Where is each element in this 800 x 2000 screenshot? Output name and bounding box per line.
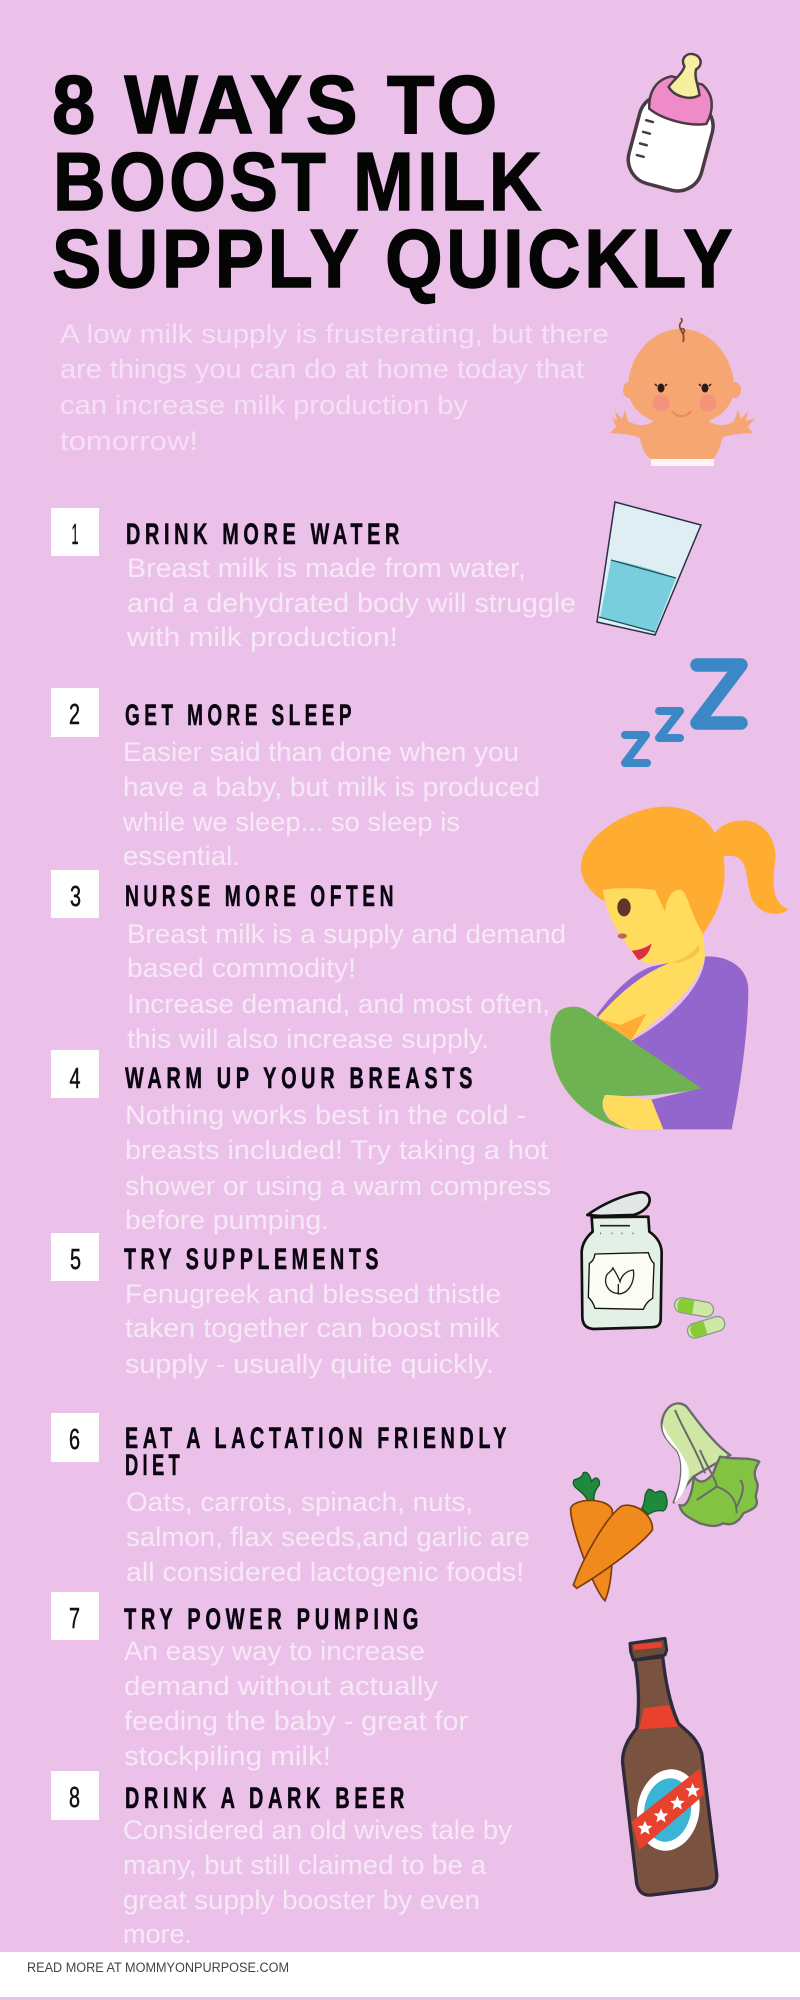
heading 3: NURSE MORE OFTEN: [125, 880, 398, 913]
icon: baby bottle: [623, 45, 731, 197]
number badge 6: 6: [69, 1424, 80, 1456]
body text 8: many, but still claimed to be a: [123, 1850, 486, 1880]
number badge 5: 5: [70, 1244, 81, 1276]
heading 6: EAT A LACTATION FRIENDLY: [125, 1422, 511, 1455]
number badge 7: 7: [69, 1603, 80, 1635]
icon: dark beer bottle: [623, 1638, 717, 1895]
body text 5: taken together can boost milk: [125, 1313, 501, 1343]
body text 1: [126, 553, 576, 652]
body text 3: Increase demand, and most often,: [127, 989, 550, 1019]
body text 7: feeding the baby - great for: [124, 1706, 468, 1736]
body text 5: [125, 1279, 501, 1379]
body text 5: Fenugreek and blessed thistle: [125, 1279, 501, 1309]
title: 8 WAYS TO: [52, 58, 501, 151]
body text 7: [124, 1636, 468, 1771]
icon: supplement jar and capsules: [582, 1192, 727, 1340]
heading 4: WARM UP YOUR BREASTS: [125, 1062, 477, 1095]
intro text: can increase milk production by: [60, 390, 469, 420]
step 7: [51, 1592, 468, 1771]
icon: sleeping Zs: [625, 665, 741, 763]
body text 7: demand without actually: [124, 1671, 439, 1701]
step 2: [51, 688, 540, 871]
body text 4: [125, 1100, 551, 1235]
number badge 7: [51, 1592, 99, 1640]
body text 2: essential.: [123, 841, 240, 871]
number badge 8: 8: [69, 1782, 80, 1814]
body text 3: Breast milk is a supply and demand: [127, 919, 566, 949]
number badge 5: [51, 1233, 99, 1281]
body text 8: more.: [123, 1919, 192, 1949]
title: BOOST MILK: [53, 135, 545, 228]
heading 8: DRINK A DARK BEER: [125, 1782, 409, 1815]
body text 2: [122, 737, 540, 871]
body text 4: breasts included! Try taking a hot: [125, 1135, 549, 1165]
heading 6: DIET: [125, 1449, 184, 1482]
heading 7: TRY POWER PUMPING: [124, 1603, 423, 1636]
body text 6: [126, 1487, 530, 1587]
body text 6: all considered lactogenic foods!: [126, 1557, 524, 1587]
footer text: READ MORE AT MOMMYONPURPOSE.COM: [27, 1960, 289, 1975]
intro text: tomorrow!: [60, 426, 198, 456]
body text 4: before pumping.: [125, 1205, 329, 1235]
step 3: [51, 870, 566, 1054]
number badge 6: [51, 1413, 99, 1462]
body text 6: salmon, flax seeds,and garlic are: [126, 1522, 530, 1552]
body text 7: An easy way to increase: [124, 1636, 425, 1666]
title: [52, 58, 736, 305]
heading 2: GET MORE SLEEP: [125, 699, 356, 732]
body text 6: Oats, carrots, spinach, nuts,: [126, 1487, 473, 1517]
number badge 1: [51, 508, 99, 556]
step 5: [51, 1233, 501, 1379]
icon: breastfeeding mother: [550, 807, 788, 1129]
body text 4: shower or using a warm compress: [125, 1171, 551, 1201]
number badge 3: 3: [70, 881, 81, 913]
step 8: [51, 1771, 513, 1949]
number badge 4: [51, 1050, 99, 1098]
heading 5: TRY SUPPLEMENTS: [124, 1243, 383, 1276]
step 6: [51, 1413, 530, 1587]
heading 6: [125, 1422, 511, 1482]
number badge 4: 4: [70, 1063, 80, 1095]
heading 1: DRINK MORE WATER: [126, 518, 404, 551]
intro text: A low milk supply is frusterating, but there: [60, 319, 609, 349]
title: SUPPLY QUICKLY: [52, 212, 736, 305]
body text 8: great supply booster by even: [123, 1885, 480, 1915]
icon: glass of water: [597, 502, 701, 635]
body text 7: stockpiling milk!: [124, 1741, 331, 1771]
number badge 1: 1: [72, 519, 78, 551]
body text 8: Considered an old wives tale by: [123, 1815, 513, 1845]
body text 5: supply - usually quite quickly.: [125, 1349, 494, 1379]
icon: carrots and lettuce: [571, 1403, 759, 1601]
number badge 2: 2: [69, 699, 80, 731]
number badge 3: [51, 870, 99, 918]
step 1: [51, 508, 576, 652]
body text 4: Nothing works best in the cold -: [125, 1100, 526, 1130]
body text 1: with milk production!: [126, 622, 398, 652]
body text 3: [127, 919, 566, 1054]
body text 3: this will also increase supply.: [127, 1024, 489, 1054]
number badge 2: [51, 688, 99, 737]
body text 8: [123, 1815, 513, 1949]
body text 2: Easier said than done when you: [123, 737, 519, 767]
body text 2: have a baby, but milk is produced: [123, 772, 540, 802]
intro text: [60, 319, 609, 456]
body text 1: and a dehydrated body will struggle: [127, 588, 576, 618]
body text 1: Breast milk is made from water,: [127, 553, 526, 583]
number badge 8: [51, 1771, 99, 1820]
body text 2: while we sleep... so sleep is: [122, 807, 460, 837]
step 4: [51, 1050, 551, 1235]
intro text: are things you can do at home today that: [60, 354, 585, 384]
footer bar: [0, 1952, 800, 1997]
icon: baby: [610, 318, 755, 466]
body text 3: based commodity!: [127, 953, 356, 983]
